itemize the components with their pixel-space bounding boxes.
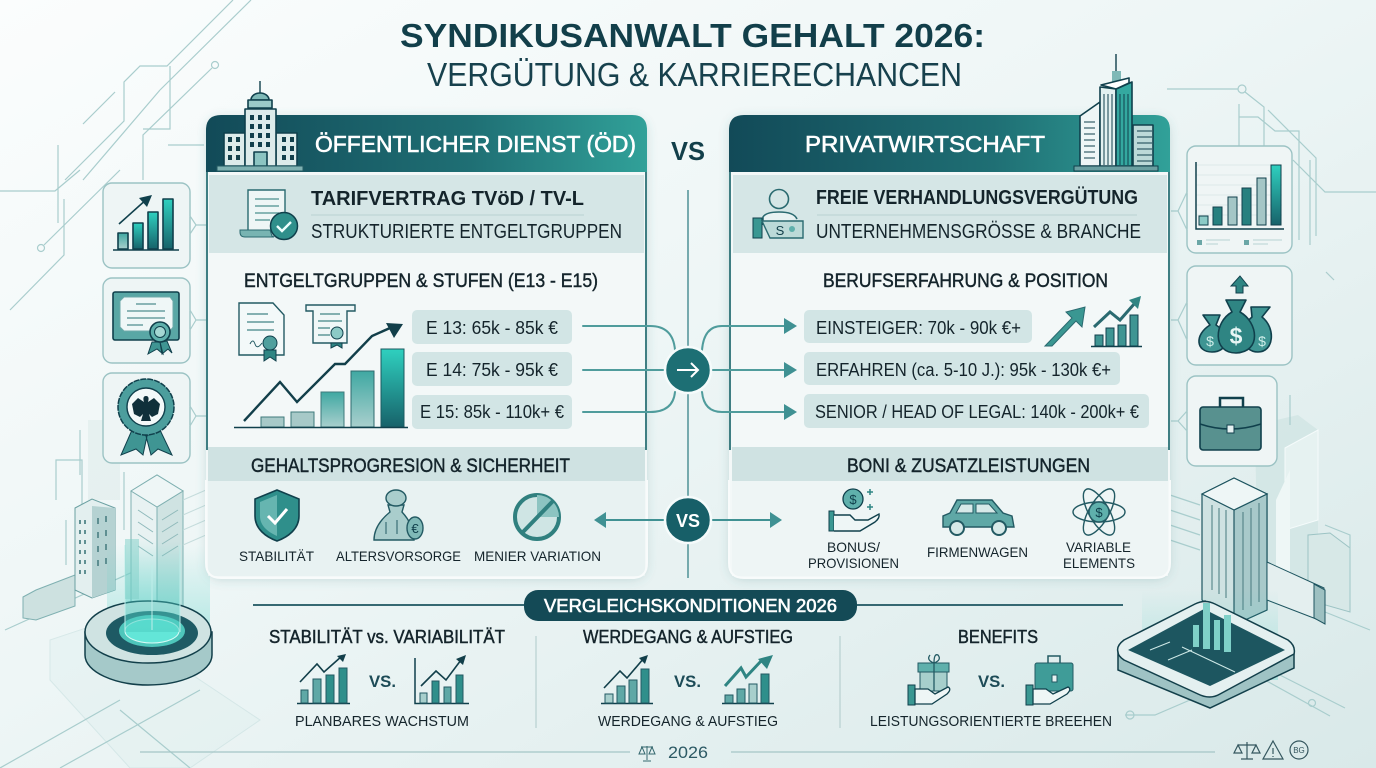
section: vergleichskonditionen: BENEFITS <box>958 627 1038 647</box>
side icon: certificate box <box>103 278 206 363</box>
panel header left <box>206 115 647 172</box>
icon: pension bag <box>374 490 423 540</box>
icon: certificate scroll <box>306 305 355 348</box>
right skyline illustration <box>1170 395 1370 630</box>
text: tarifvertrag: TARIFVERTRAG TVöD / TV-L <box>311 188 584 210</box>
labels: left benefit icons: ALTERSVORSORGE <box>336 548 461 564</box>
panel: öffentlicher dienst <box>206 81 647 578</box>
center arrow circle <box>665 347 711 393</box>
side icon: money bags box <box>1171 266 1292 365</box>
right glowing tablet <box>1118 590 1345 719</box>
section: vergleichskonditionen: VERGLEICHSKONDITIONEN 2026 <box>544 596 837 616</box>
text: tarifvertrag: STRUKTURIERTE ENTGELTGRUPPEN <box>311 221 622 243</box>
column headings: STABILITÄT vs. VARIABILITÄT <box>269 627 505 647</box>
vs comparison arrows <box>594 497 782 543</box>
side icon: money bags box: $ <box>1230 323 1243 349</box>
icon: car <box>943 500 1014 535</box>
icon: gift in hand <box>908 655 950 705</box>
text: verhandlung <box>816 186 1141 243</box>
icon: atom with dollar: $ <box>1095 505 1103 520</box>
icon: hand with coin: $ <box>849 492 857 507</box>
labels: right benefit icons <box>808 539 1135 571</box>
footer icons <box>1234 741 1308 759</box>
footer line and year <box>140 743 1215 762</box>
connector arrows <box>583 318 797 420</box>
icon: person with cash: S <box>776 223 785 238</box>
labels: left benefit icons: MENIER VARIATION <box>474 548 601 564</box>
side icon: briefcase box <box>1171 376 1277 466</box>
section: vergleichskonditionen: LEISTUNGSORIENTIERTE BREEHEN <box>870 713 1112 730</box>
band: boni <box>732 447 1168 481</box>
labels: right benefit icons: FIRMENWAGEN <box>927 544 1028 560</box>
vs comparison arrows: VS <box>676 511 700 531</box>
icon: skyscraper <box>1074 54 1158 171</box>
icon: atom with dollar <box>1073 484 1125 540</box>
section: vergleichskonditionen: WERDEGANG & AUFSTIEG <box>583 627 793 647</box>
chart icons: stability <box>297 654 469 704</box>
pills: e13 e14 e15: E 15: 85k - 110k+ € <box>420 402 564 422</box>
icon: hand with coin <box>829 489 879 531</box>
vs label: VS <box>671 136 705 166</box>
pills: e13 e14 e15: E 13: 65k - 85k € <box>426 318 558 338</box>
panel heading right: PRIVATWIRTSCHAFT <box>805 131 1045 157</box>
panel: privatwirtschaft <box>729 54 1170 578</box>
icon: contract with check <box>240 190 298 240</box>
pills: e13 e14 e15: E 14: 75k - 95k € <box>426 360 558 380</box>
heading: entgeltgruppen: ENTGELTGRUPPEN & STUFEN (E13 - E15) <box>244 271 598 292</box>
labels: left benefit icons: STABILITÄT <box>239 548 314 564</box>
column sub labels: PLANBARES WACHSTUM <box>295 713 469 730</box>
icon: signed document <box>239 303 284 361</box>
heading: berufserfahrung: BERUFSERFAHRUNG & POSITION <box>823 271 1108 292</box>
labels: right benefit icons: VARIABLE <box>1066 539 1131 555</box>
text: verhandlung: UNTERNEHMENSGRÖSSE & BRANCHE <box>816 221 1141 243</box>
band: verhandlung <box>733 175 1167 253</box>
left glowing platform <box>0 539 260 768</box>
center line <box>687 190 689 578</box>
heading: boni: BONI & ZUSATZLEISTUNGEN <box>847 456 1090 477</box>
icon: public building <box>217 81 303 171</box>
footer icons: BG <box>1293 746 1305 755</box>
side icon: growth chart box <box>103 183 206 268</box>
icon: small growth chart <box>1091 296 1142 346</box>
icon: pension bag: € <box>411 521 419 536</box>
circuit lines top right <box>1167 85 1376 280</box>
title: SYNDIKUSANWALT GEHALT 2026: <box>400 17 985 54</box>
pills: career levels: ERFAHREN (ca. 5-10 J.): 95k - 130k €+ <box>816 360 1111 380</box>
section: vergleichskonditionen: WERDEGANG & AUFSTIEG <box>598 713 778 730</box>
side icon: money bags box: $ <box>1258 333 1266 349</box>
title: VERGÜTUNG & KARRIERECHANCEN <box>427 56 962 93</box>
icon: briefcase in hand <box>1026 656 1073 705</box>
side icon: seal with eagle box <box>103 373 206 463</box>
band: gehaltsprogression <box>208 447 645 481</box>
text: verhandlung: FREIE VERHANDLUNGSVERGÜTUNG <box>816 186 1138 209</box>
icon: person with cash <box>753 190 803 238</box>
vs small 3: VS. <box>978 672 1005 691</box>
footer line and year: 2026 <box>668 743 708 762</box>
panel heading left: ÖFFENTLICHER DIENST (ÖD) <box>315 131 636 157</box>
section: vergleichskonditionen <box>253 590 1123 730</box>
circuit lines top left <box>0 0 251 310</box>
side icon: bar chart box (right) <box>1171 146 1292 253</box>
vs small 1: VS. <box>369 672 396 691</box>
panel header right <box>729 115 1170 172</box>
text: tarifvertrag <box>311 188 622 243</box>
chart icons: career <box>601 655 774 704</box>
left skyline illustration <box>5 420 206 630</box>
labels: right benefit icons: BONUS/ <box>827 539 880 555</box>
pills: career levels: SENIOR / HEAD OF LEGAL: 140k - 200k+ € <box>815 402 1139 422</box>
heading: gehaltsprogression: GEHALTSPROGRESION & SICHERHEIT <box>251 456 570 477</box>
icon: shield <box>255 490 299 541</box>
band: tarifvertrag <box>209 175 644 253</box>
labels: right benefit icons: ELEMENTS <box>1063 555 1135 571</box>
icon: no variation <box>515 495 559 539</box>
chart: rising bars left <box>234 323 408 428</box>
pills: career levels <box>804 310 1149 428</box>
title <box>400 17 985 93</box>
vs small 2: VS. <box>674 672 701 691</box>
pills: career levels: EINSTEIGER: 70k - 90k €+ <box>816 318 1021 338</box>
pills: e13 e14 e15 <box>412 310 572 429</box>
labels: left benefit icons <box>239 548 601 564</box>
icon: rising arrow <box>1045 307 1085 346</box>
labels: right benefit icons: PROVISIONEN <box>808 555 899 571</box>
side icon: money bags box: $ <box>1206 333 1214 349</box>
